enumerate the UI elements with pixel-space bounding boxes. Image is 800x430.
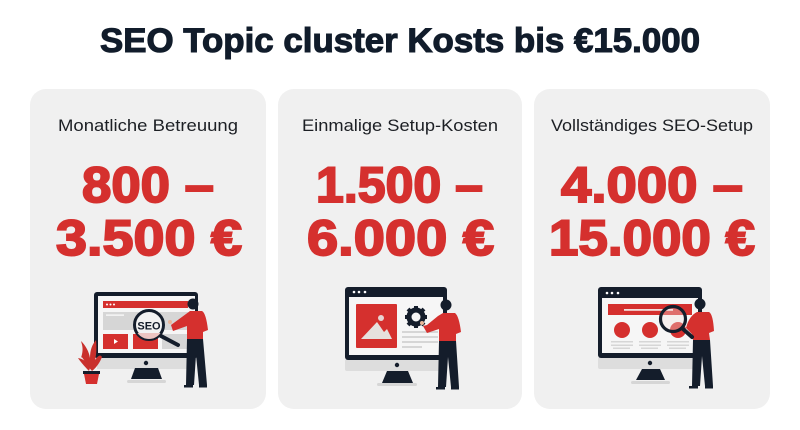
price: 1.500 – 6.000 €: 6.000 € — [307, 210, 494, 266]
icon: image placeholder — [356, 304, 397, 348]
label: Monatliche Betreuung: Monatliche Betreuung — [58, 117, 238, 135]
illustration: monitor with SEO magnifier — [78, 292, 208, 388]
price: 800 – 3.500 €: 3.500 € — [56, 210, 242, 266]
icon: plant — [78, 340, 102, 384]
price: 4.000 – 15.000 €: 15.000 € — [549, 210, 755, 266]
person — [420, 300, 461, 390]
panel: Monatliche Betreuung — [30, 89, 266, 409]
price: 4.000 – 15.000 €: 4.000 – — [561, 157, 743, 213]
price: 1.500 – 6.000 € — [307, 157, 494, 266]
price: 4.000 – 15.000 € — [549, 157, 755, 266]
panel: Vollständiges SEO-Setup — [534, 89, 770, 409]
label: Einmalige Setup-Kosten: Einmalige Setup-Kosten — [302, 117, 498, 135]
title: SEO Topic cluster Kosts bis €15.000 — [100, 22, 700, 60]
person — [686, 298, 714, 388]
illustration: monitor with magnifier — [598, 287, 714, 388]
price: 800 – 3.500 € — [56, 157, 242, 266]
icon: gear — [405, 306, 427, 328]
price: 1.500 – 6.000 €: 1.500 – — [316, 157, 483, 213]
panel: Einmalige Setup-Kosten — [278, 89, 522, 409]
label: Vollständiges SEO-Setup: Vollständiges SEO-Setup — [551, 117, 753, 135]
icon: magnifying glass — [660, 306, 692, 337]
icon: magnifying glass with SEO: SEO — [137, 320, 161, 332]
person — [168, 298, 208, 388]
price: 800 – 3.500 €: 800 – — [82, 157, 214, 213]
illustration: monitor with image and gear — [345, 287, 461, 390]
